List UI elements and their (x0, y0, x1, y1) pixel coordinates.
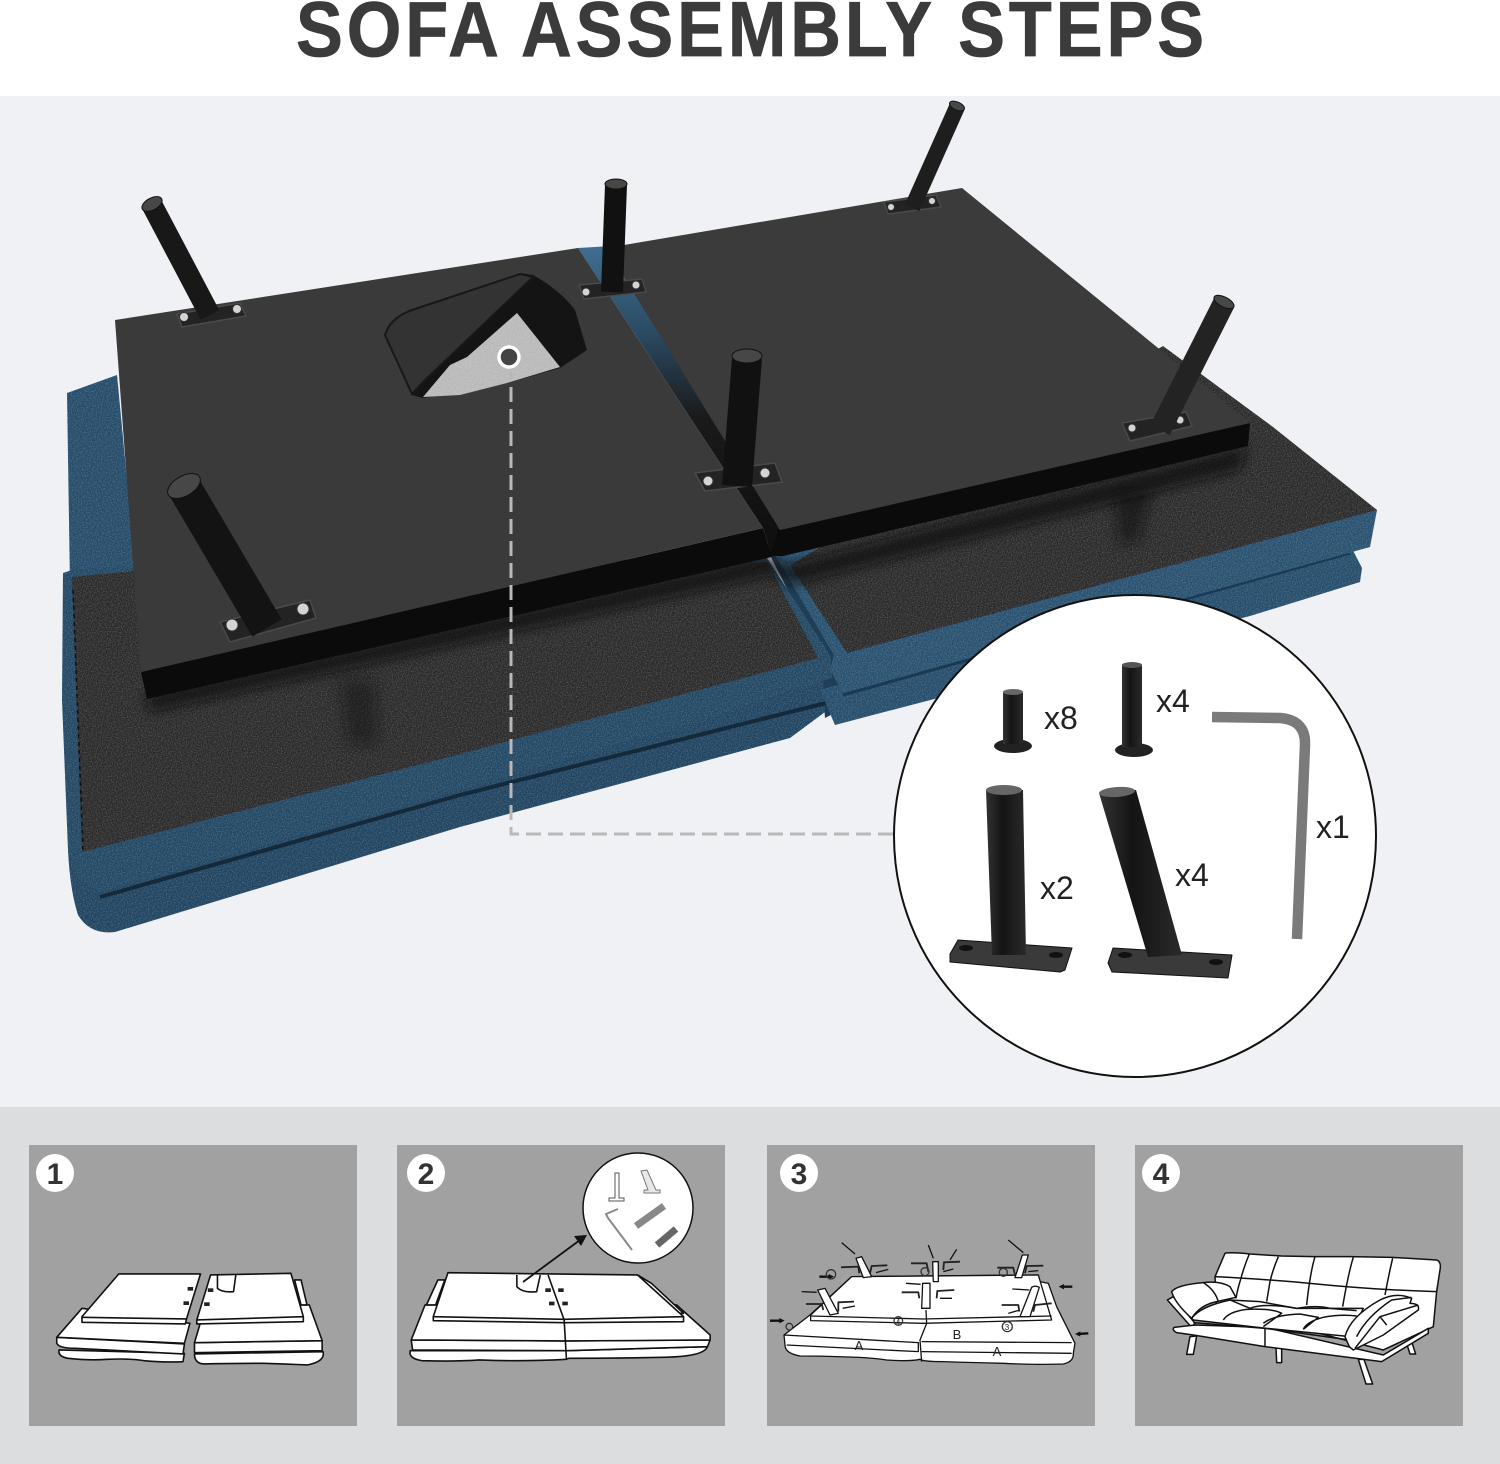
step number 1: 1 (47, 1158, 63, 1191)
panel: step 1 (29, 1145, 357, 1426)
short bolt x8: x8 (1044, 700, 1078, 736)
step number 4: 4 (1153, 1158, 1170, 1191)
board shadows (145, 445, 1248, 712)
angled leg x4 (1099, 786, 1232, 978)
center cushion gap (765, 545, 850, 718)
seam between boards (578, 246, 785, 557)
left back cushion edge (67, 375, 136, 585)
leg plates (177, 195, 1192, 642)
panel: steps strip (0, 1107, 1500, 1464)
short bolt x8 (994, 689, 1078, 753)
hex key x1 (1212, 717, 1350, 939)
zipper pocket (385, 273, 587, 398)
panel: product photo background (0, 96, 1500, 1107)
long bolt x4: x4 (1156, 683, 1190, 719)
thin arrows (802, 1240, 1038, 1313)
step number 3 (780, 1154, 818, 1192)
straight leg x2: x2 (1040, 870, 1074, 906)
panel: step 2 (397, 1145, 725, 1426)
left board top surface (115, 248, 763, 672)
sofa diagram 2 (410, 1273, 710, 1361)
heavy arrows (770, 1277, 1088, 1334)
panel: step 4 (1135, 1145, 1463, 1426)
legs (856, 1257, 872, 1278)
right lower layer blue (820, 535, 1362, 725)
leg shadows (1115, 490, 1152, 543)
right cushion fold seam (843, 553, 1350, 695)
hardware inset (583, 1153, 693, 1263)
left board front edge (141, 528, 772, 699)
diagram letters (855, 1318, 1010, 1359)
finished sofa drawing (1167, 1253, 1440, 1384)
dashed connector (511, 365, 895, 834)
step number 3: 3 (791, 1158, 807, 1191)
right lower cushion black fabric (790, 346, 1377, 653)
right board front edge (770, 423, 1250, 556)
sofa diagram 3 (770, 1240, 1088, 1364)
bent lines (806, 1262, 1052, 1312)
diagram letters: A (993, 1344, 1002, 1359)
diagram letters: 3 (1005, 1323, 1010, 1332)
pocket hole (385, 273, 587, 398)
step number 2: 2 (418, 1158, 434, 1191)
left lower cushion black fabric (72, 562, 818, 852)
furniture legs (152, 107, 1224, 628)
long bolt x4 (1115, 662, 1190, 757)
straight leg x2 (950, 785, 1074, 972)
step number 1 (36, 1154, 74, 1192)
panel: sofa underside photo (62, 99, 1377, 932)
pocket flap (385, 274, 533, 394)
panel: step 3 (767, 1145, 1095, 1426)
stitch line (73, 590, 83, 850)
diagram letters: 4 (896, 1318, 901, 1327)
right board top surface (606, 188, 1250, 530)
step number 4 (1142, 1154, 1180, 1192)
callout: hardware circle (894, 595, 1376, 1077)
left lower layer blue (68, 675, 825, 932)
hex key x1: x1 (1316, 809, 1350, 845)
connector dot (499, 347, 519, 367)
diagram letters: A (855, 1338, 864, 1353)
arrow to hardware (523, 1235, 587, 1282)
left cushion blue band (62, 558, 832, 892)
step number 2 (407, 1154, 445, 1192)
diagram letters: B (953, 1327, 961, 1342)
leg caps (139, 99, 1236, 504)
left cushion fold seam (100, 703, 826, 897)
sofa diagram 1 (57, 1273, 323, 1365)
bolts (180, 198, 1184, 631)
silver lining (423, 313, 560, 397)
angled leg x4: x4 (1175, 857, 1209, 893)
circled marks (786, 1268, 1012, 1332)
right cushion blue band (772, 440, 1377, 693)
